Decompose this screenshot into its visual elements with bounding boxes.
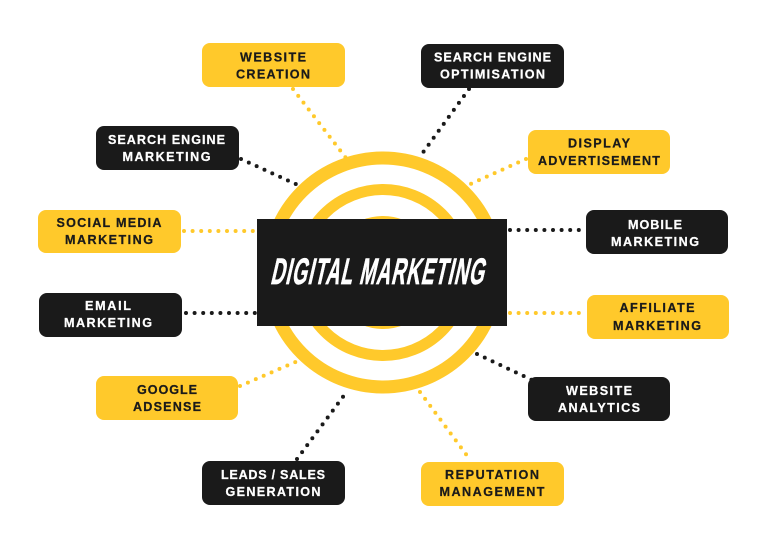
connector: reputation management: [420, 392, 471, 461]
box: google adsense: GOOGLE: [137, 383, 197, 397]
box: search engine optimisation: OPTIMISATION: [440, 68, 545, 82]
box: reputation management: MANAGEMENT: [440, 485, 545, 499]
box: social media marketing: MARKETING: [65, 233, 153, 247]
central title banner: [257, 219, 507, 326]
box: mobile marketing: MARKETING: [611, 235, 699, 249]
box: google adsense: ADSENSE: [133, 400, 201, 414]
connector: search engine marketing: [241, 159, 300, 186]
connector: leads / sales generation: [297, 390, 348, 459]
box: mobile marketing: [586, 210, 728, 254]
box: website analytics: ANALYTICS: [558, 401, 640, 415]
connector: website creation: [293, 89, 346, 158]
box: search engine marketing: SEARCH ENGINE: [108, 133, 225, 147]
concentric rings: [268, 158, 498, 387]
box: display advertisement: DISPLAY: [568, 136, 631, 150]
box: mobile marketing: MOBILE: [628, 218, 682, 232]
box: leads / sales generation: [202, 461, 345, 505]
box: email marketing: EMAIL: [85, 299, 131, 313]
connector: mobile marketing: [510, 228, 586, 232]
box: affiliate marketing: [587, 295, 729, 339]
connector: google adsense: [240, 360, 300, 386]
connector: social media marketing: [184, 229, 258, 233]
connector: affiliate marketing: [510, 311, 587, 315]
box: social media marketing: SOCIAL MEDIA: [56, 216, 162, 230]
connector: search engine optimisation: [419, 89, 469, 158]
connector: website analytics: [477, 354, 532, 380]
box: website creation: WEBSITE: [240, 50, 306, 64]
box: website analytics: WEBSITE: [566, 384, 632, 398]
box: leads / sales generation: GENERATION: [226, 485, 320, 499]
box: reputation management: REPUTATION: [445, 468, 539, 482]
box: reputation management: [421, 462, 564, 506]
title: DIGITAL MARKETING: [268, 252, 490, 293]
connector: display advertisement: [466, 159, 526, 186]
box: display advertisement: ADVERTISEMENT: [538, 154, 660, 168]
connector: email marketing: [186, 311, 258, 315]
box: search engine optimisation: SEARCH ENGINE: [434, 50, 551, 64]
box: search engine optimisation: [421, 44, 564, 88]
box: search engine marketing: MARKETING: [122, 150, 211, 164]
box: google adsense: [96, 376, 238, 420]
box: social media marketing: [38, 210, 181, 253]
box: website creation: CREATION: [236, 68, 310, 82]
box: affiliate marketing: AFFILIATE: [620, 301, 694, 315]
box: website analytics: [528, 377, 670, 421]
box: affiliate marketing: MARKETING: [613, 319, 701, 333]
box: website creation: [202, 43, 345, 87]
box: email marketing: [39, 293, 182, 337]
box: email marketing: MARKETING: [64, 316, 152, 330]
box: leads / sales generation: LEADS / SALES: [221, 468, 325, 482]
box: display advertisement: [528, 130, 670, 174]
box: search engine marketing: [96, 126, 239, 170]
